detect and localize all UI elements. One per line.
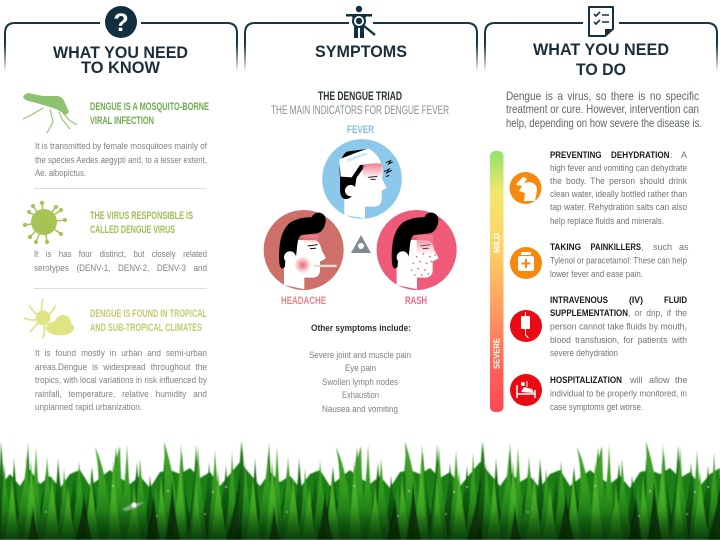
text: preventing dehydration: tap water. Rehydration salts can also: [550, 202, 687, 212]
icon: triangle: [351, 235, 371, 253]
text: intravenous: person cannot take fluids by mouth,: [550, 322, 687, 332]
text: taking painkillers: TAKING: [550, 242, 581, 252]
text: distribution: tropics, with local variations in risk influenced by: [35, 375, 207, 385]
text: transmission: Ae. albopictus.: [35, 168, 86, 178]
illustration: fever face: [322, 139, 402, 219]
text: serotypes: serotypes (DENV-1, DENV-2, DENV-3 and: [34, 263, 207, 273]
icon: virus: [23, 201, 67, 244]
text: other symptoms: [309, 323, 411, 414]
heading: what you need to do: [533, 40, 669, 79]
text: taking painkillers: such: [653, 242, 672, 252]
panel: symptoms: [245, 6, 477, 414]
label: rash: RASH: [405, 295, 427, 307]
icon: person with magnifier: [346, 6, 375, 38]
text: transmission: It is transmitted by female mosquitoes mainly of: [35, 141, 207, 151]
text: other symptoms: Nausea and vomiting: [322, 404, 398, 414]
illustration: headache face: [264, 210, 344, 290]
text: intravenous: (IV): [629, 295, 643, 305]
icon: mosquito: [23, 93, 77, 133]
icon: drinking: [510, 172, 542, 204]
label: severe: SEVERE: [492, 338, 502, 369]
text: preventing dehydration: PREVENTING: [550, 150, 602, 160]
subheading: virus: [90, 210, 193, 236]
text: distribution: It is found mostly in urban and semi-urban: [35, 348, 207, 358]
subheading: climates: AND SUB-TROPICAL CLIMATES: [90, 322, 202, 334]
text: other symptoms: Severe joint and muscle pain: [309, 350, 411, 360]
text: distribution: areas.Dengue is widespread throughout the: [35, 362, 207, 372]
heading: dengue triad: [271, 89, 449, 117]
text: other symptoms: Exhaustion: [342, 390, 379, 400]
text: other symptoms: Swollen lymph nodes: [322, 377, 398, 387]
text: hospitalization: allow: [649, 375, 670, 385]
text: hospitalization: [550, 375, 688, 412]
text: serotypes: It is has four distinct, but closely related: [34, 249, 207, 259]
panel: what you need to know: [5, 6, 237, 412]
text: intravenous: SUPPLEMENTATION: [550, 308, 628, 318]
text: intravenous: INTRAVENOUS: [550, 295, 608, 305]
text: intravenous: , or drip, if the: [628, 308, 687, 318]
subheading: mosquito-borne: DENGUE IS A MOSQUITO-BORNE: [90, 101, 209, 113]
text: taking painkillers: [550, 242, 689, 279]
panel frame: [485, 23, 717, 72]
text: preventing dehydration: A: [681, 150, 687, 160]
label: headache: HEADACHE: [281, 295, 326, 307]
text: preventing dehydration: help replace fluids and minerals.: [550, 216, 664, 226]
heading: what you need to know: [53, 43, 188, 77]
text: transmission: the species Aedes aegypti and, to a lesser extent,: [35, 155, 207, 165]
subheading: climates: [90, 308, 207, 334]
text: preventing dehydration: :: [670, 150, 673, 160]
text: taking painkillers: ,: [641, 242, 644, 252]
text: hospitalization: HOSPITALIZATION: [550, 375, 622, 385]
text: distribution: unplanned rapid urbanization.: [35, 402, 142, 412]
triad diagram: [264, 124, 457, 307]
text: intravenous: blood transfusion, for patients with: [550, 335, 687, 345]
text: hospitalization: will: [629, 375, 642, 385]
icon: checklist: [589, 7, 613, 36]
illustration: rash face: [377, 210, 457, 290]
heading: dengue triad: THE DENGUE TRIAD: [318, 89, 402, 103]
subheading: climates: DENGUE IS FOUND IN TROPICAL: [90, 308, 207, 320]
text: distribution: [35, 348, 207, 412]
text: preventing dehydration: [550, 150, 687, 226]
text: preventing dehydration: DEHYDRATION: [611, 150, 670, 160]
text: other symptoms: Other symptoms include:: [311, 323, 411, 333]
text: taking painkillers: Tylenol or paracetamol: These can help: [550, 256, 687, 266]
label: fever: FEVER: [347, 124, 374, 136]
heading: what you need to know: TO KNOW: [81, 58, 161, 77]
label: mild: MILD: [492, 233, 502, 253]
icon: medicine bottle: [510, 247, 542, 279]
text: intro: [506, 89, 702, 130]
panel frame: [245, 23, 477, 72]
heading: what you need to know: WHAT YOU NEED: [53, 43, 188, 62]
text: taking painkillers: PAINKILLERS: [590, 242, 641, 252]
heading: what you need to do: TO DO: [576, 60, 626, 79]
panel: what you need to do: [485, 7, 717, 412]
text: hospitalization: case symptoms get worse.: [550, 402, 643, 412]
text: transmission: [35, 141, 207, 178]
text: preventing dehydration: clean water, ideally bottled rather than: [550, 189, 687, 199]
icon: sun and cloud: [24, 299, 74, 338]
subheading: mosquito-borne: [90, 101, 209, 127]
text: intravenous: FLUID: [664, 295, 687, 305]
text: taking painkillers: as: [679, 242, 689, 252]
heading: symptoms: SYMPTOMS: [315, 42, 407, 61]
text: taking painkillers: lower fever and ease pain.: [550, 269, 643, 279]
grass strip: [0, 441, 720, 540]
subheading: mosquito-borne: VIRAL INFECTION: [90, 115, 154, 127]
icon: question mark: [105, 6, 137, 38]
text: other symptoms: Eye pain: [345, 363, 376, 373]
text: intravenous: severe dehydration: [550, 348, 618, 358]
text: distribution: rainfall, temperature, relative humidity and: [35, 389, 207, 399]
text: hospitalization: the: [675, 375, 688, 385]
text: preventing dehydration: the body. The person should drink: [550, 176, 687, 186]
subheading: virus: CALLED DENGUE VIRUS: [90, 224, 175, 236]
subheading: virus: THE VIRUS RESPONSIBLE IS: [90, 210, 193, 222]
heading: dengue triad: THE MAIN INDICATORS FOR DENGUE FEVER: [271, 103, 449, 117]
icon: hospital bed: [510, 374, 542, 406]
icon: iv drip: [510, 310, 542, 342]
text: serotypes: [34, 249, 207, 273]
icon: question mark: ?: [113, 9, 129, 37]
severity bar: [490, 151, 504, 412]
panel frame: [5, 23, 237, 72]
text: intravenous: [550, 295, 687, 358]
text: hospitalization: individual to be properly monitored, in: [550, 388, 687, 398]
heading: what you need to do: WHAT YOU NEED: [533, 40, 669, 59]
text: preventing dehydration: high fever and vomiting can dehydrate: [550, 163, 687, 173]
